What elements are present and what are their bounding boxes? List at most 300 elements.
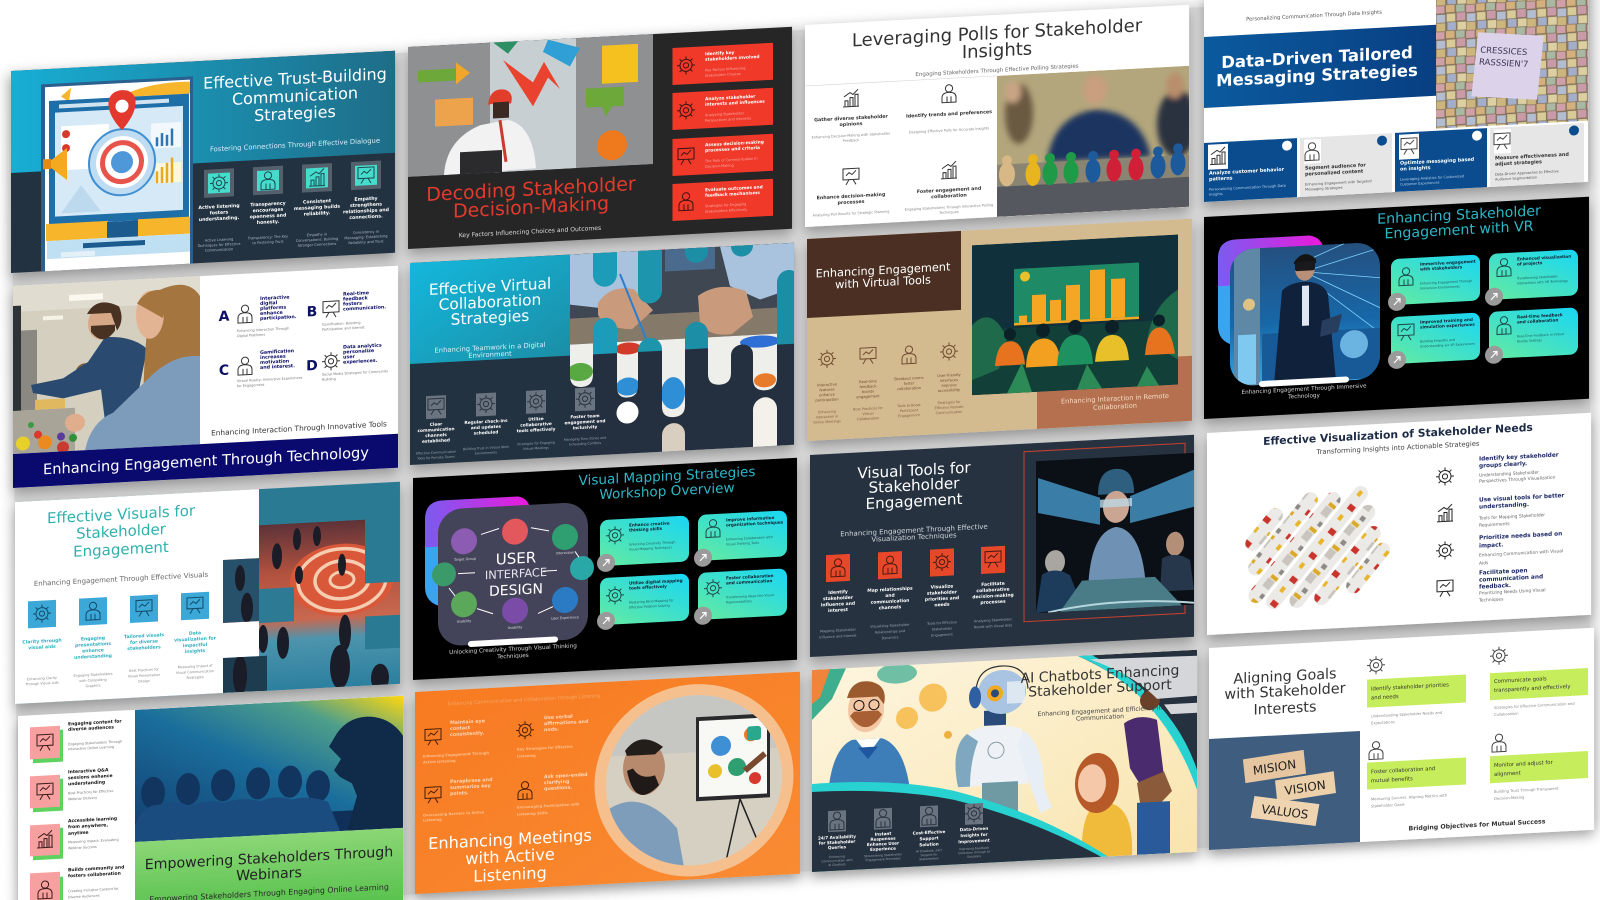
column labels: Enhance User <box>867 840 900 847</box>
column labels: for diverse <box>130 638 158 646</box>
caption box: Enhancing Interaction in Remote <box>1061 392 1169 406</box>
column captions: Best Practices for <box>129 667 159 673</box>
footer subtitle: Bridging Objectives for Mutual Success <box>1409 818 1546 832</box>
row 2: Best Practices for Effective <box>68 789 113 795</box>
card 3: on insights <box>1400 165 1431 173</box>
column labels: stakeholder <box>927 589 958 597</box>
row 1 <box>30 719 122 763</box>
option D: personalize <box>343 348 375 356</box>
row 1: diverse audiences <box>68 724 114 733</box>
column labels: 24/7 Availability <box>818 834 856 841</box>
backing shape <box>1218 235 1324 346</box>
column captions: Building Trust in Virtual Work <box>463 445 509 451</box>
card 4: Representations <box>726 599 752 605</box>
card 2: Visual Thinking Tools <box>726 541 759 547</box>
column labels: visual aids <box>28 644 56 651</box>
column captions: to Fostering Trust <box>252 240 284 245</box>
card 4: Stakeholders Effectively <box>705 208 747 214</box>
option C: Gamification <box>260 348 295 356</box>
title: Webinars <box>236 865 302 885</box>
column labels: strengthens <box>350 201 382 209</box>
card 4 <box>694 568 787 625</box>
column captions: Streamlining Stakeholder <box>864 852 903 858</box>
option B: feedback <box>343 295 369 303</box>
column captions: Communication with <box>822 858 853 863</box>
item icons <box>425 721 534 804</box>
image: mission vision values blocks: MISION <box>1252 757 1297 778</box>
column captions: Strategies <box>186 675 204 680</box>
title bar <box>13 434 398 488</box>
item labels: impact. <box>1479 542 1503 550</box>
card 4: Real-Time Feedback in Virtual <box>1517 332 1564 339</box>
user interface design diagram: Target Group <box>453 557 476 562</box>
title box <box>807 231 961 318</box>
column captions: Communication <box>205 247 233 253</box>
subtitle: Enhancing Engagement Through Effective <box>840 523 988 538</box>
item captions: Techniques <box>1478 596 1504 604</box>
card 3: Decision-Making <box>705 163 734 169</box>
subtitle: Transforming Insights into Actionable Strategies <box>1316 440 1480 456</box>
column labels: Queries <box>828 844 847 850</box>
column labels: scheduled <box>474 429 498 437</box>
column captions: Effective Communication <box>416 450 456 456</box>
column captions: with Compelling <box>79 678 107 683</box>
card 2: organization techniques <box>726 519 784 528</box>
row 2: understanding <box>68 779 105 787</box>
item labels: affirmations and <box>544 719 589 727</box>
card 2: personalized content <box>1305 169 1364 178</box>
card 1: with stakeholders <box>1420 264 1463 272</box>
column labels: Cost-Effective <box>913 829 946 836</box>
option C: increases <box>260 354 286 361</box>
item captions: Encouraging Participation with <box>517 802 580 810</box>
column labels: stakeholder <box>823 595 854 602</box>
column captions: Engagement Processes <box>866 856 901 862</box>
column labels: Empathy <box>354 196 378 203</box>
option A: platforms <box>260 305 286 312</box>
item labels: Facilitate open <box>1479 568 1527 577</box>
column labels: Transparency <box>250 201 286 208</box>
backing shape <box>425 496 531 607</box>
title: Communication <box>232 83 358 109</box>
title: Empowering Stakeholders Through <box>145 844 393 873</box>
item labels: questions. <box>544 785 572 792</box>
item captions: Active Listening <box>423 759 456 765</box>
column labels: messaging builds <box>294 204 340 212</box>
item labels: summarize key <box>450 783 492 791</box>
column labels: channels <box>879 604 902 611</box>
icon row <box>843 84 957 185</box>
card 1 <box>1204 138 1297 202</box>
column captions: Engagement <box>898 413 920 418</box>
card 4: Real-time feedback <box>1517 312 1563 320</box>
column labels: enhance <box>819 392 836 397</box>
card 3: Leveraging Analytics for Customized <box>1400 174 1464 182</box>
column labels: Support <box>920 835 938 841</box>
image: hands and striped mask <box>570 242 794 456</box>
item captions: Listening <box>423 818 442 823</box>
column captions: Collaboration <box>857 416 879 421</box>
goal 1 <box>1367 651 1466 726</box>
slide: Visual Mapping Strategies Workshop Overview <box>413 458 797 680</box>
column captions: Design <box>138 679 150 684</box>
card 1: Insights <box>1209 192 1223 197</box>
goal 2: transparently and effectively <box>1494 684 1570 694</box>
item labels: understanding. <box>1479 502 1529 511</box>
card 4: Measure effectiveness and <box>1495 152 1569 162</box>
column labels: Clarity through <box>22 638 62 646</box>
column labels: boosts <box>862 389 874 394</box>
card 1: Enhancing Engagement Through <box>1420 279 1472 286</box>
item captions: Tools for Mapping Stakeholder <box>1478 512 1545 522</box>
column labels: openness and <box>250 212 286 220</box>
row 4 <box>30 864 124 900</box>
user interface design diagram: INTERFACE <box>485 565 547 582</box>
card 1 <box>672 43 773 85</box>
teal inset tile <box>259 587 294 623</box>
card 3: Mastering Mind Mapping for <box>629 598 674 605</box>
item captions: Engaging Stakeholders Through Interactive Polling <box>905 203 993 212</box>
column labels: interfaces <box>940 378 958 383</box>
icon row <box>828 803 983 832</box>
card 3: Optimize messaging based <box>1400 157 1475 167</box>
user interface design diagram: Usability <box>508 625 522 630</box>
title: Visual Tools for <box>857 459 971 483</box>
goal 3: Foster collaboration and <box>1371 766 1435 775</box>
slide: Enhancing Stakeholder Engagement with VR <box>1204 197 1589 419</box>
title box: Enhancing Engagement <box>816 260 951 281</box>
slide: Enhancing Engagement Through Technology <box>13 266 398 488</box>
column labels: understanding. <box>199 215 239 223</box>
illustration: man, robot and woman <box>812 648 1197 875</box>
column labels: decision-making <box>972 592 1014 600</box>
subtitle: Environment <box>468 350 512 360</box>
column labels: collaboration <box>897 386 922 391</box>
title: Interests <box>1254 699 1316 719</box>
item captions: Feedback <box>843 138 860 143</box>
image: diagonal pills collage <box>1218 450 1412 649</box>
title: Aligning Goals <box>1233 666 1337 688</box>
column labels: for Stakeholder <box>819 839 856 846</box>
goal 4: Building Trust Through Transparent <box>1494 787 1559 794</box>
title: Strategies <box>254 102 336 125</box>
column labels: Clear <box>430 421 443 428</box>
title: Listening <box>473 863 547 886</box>
card 4: Audience Segmentation <box>1495 175 1537 182</box>
column labels: and <box>885 593 895 599</box>
option B: Real-time <box>343 290 370 298</box>
title: Engagement <box>866 490 962 513</box>
row 1: Engaging Stakeholders Through <box>68 740 122 746</box>
goal 1: and needs <box>1371 694 1399 701</box>
column captions: Influence and Interest <box>819 634 857 640</box>
subtitle bar <box>1164 703 1197 714</box>
title box: with Virtual Tools <box>835 273 931 292</box>
column labels: Foster team <box>570 413 600 421</box>
column labels: Facilitate <box>981 581 1005 588</box>
title: Effective Visuals for <box>47 501 196 527</box>
card 2: Analyzing Stakeholder <box>705 111 745 117</box>
title: AI Chatbots Enhancing <box>1021 663 1179 687</box>
column captions: Dynamics <box>882 635 899 640</box>
option D: Data analytics <box>343 343 382 351</box>
card 1: Immersive Environments <box>1420 285 1460 291</box>
option B: Gamification: Boosting <box>322 321 361 327</box>
goal 3 <box>1367 737 1466 809</box>
column labels: features <box>819 388 835 392</box>
row 3 <box>30 816 119 860</box>
caption box <box>1037 356 1192 429</box>
title: Enhancing Stakeholder <box>1377 203 1541 228</box>
column labels: Tailored visuals <box>124 632 164 640</box>
card 3: Building Empathy and <box>1420 338 1455 344</box>
slide: Empowering Stakeholders Through Webinars <box>18 696 403 900</box>
item captions: Key Strategies for Effective <box>517 745 573 752</box>
column labels: Instant <box>875 831 891 837</box>
card 4: and collaboration <box>1517 317 1558 325</box>
column captions: Managing Time Zones and <box>564 436 606 442</box>
option D: user <box>343 354 356 361</box>
column labels: improve <box>941 383 957 388</box>
goal 2: Collaboration <box>1494 712 1519 717</box>
title: Engagement with VR <box>1384 219 1534 242</box>
column labels: User-friendly <box>937 373 962 378</box>
column labels: Experience <box>870 846 896 852</box>
subtitle: Personalizing Communication Through Data Insights <box>1246 10 1382 23</box>
item captions: Enhancing Engagement Through <box>423 751 489 759</box>
user interface design diagram: Usability <box>457 619 471 624</box>
card 4: Foster collaboration <box>726 573 774 581</box>
column labels: collaborative <box>520 421 552 429</box>
option A: enhance <box>260 310 284 317</box>
goal 1: Identify stakeholder priorities <box>1371 682 1449 692</box>
title: with Active <box>465 845 555 868</box>
title: Decoding Stakeholder <box>426 173 636 206</box>
column labels: impactful <box>183 642 208 649</box>
subtitle: Engaging Stakeholders Through Effective Polling Strategies <box>915 64 1079 78</box>
column labels: Breakout rooms <box>894 376 924 381</box>
card 2 <box>1485 249 1578 306</box>
card 2: Segment audience for <box>1305 162 1366 172</box>
item captions: Techniques <box>938 210 959 215</box>
column captions: AI Chatbots: 24/7 <box>916 848 942 854</box>
column captions: Needs with Visual Aids <box>974 623 1012 629</box>
card 2 <box>1300 133 1392 197</box>
item labels: collaboration <box>931 192 967 200</box>
image: wall of sticky notes: CRESSICES <box>1480 46 1528 58</box>
title: Workshop Overview <box>599 480 735 503</box>
column labels: communication <box>417 426 455 434</box>
slide: Visual Tools for Stakeholder Engagement <box>810 435 1194 657</box>
card 4: feedback mechanisms <box>705 190 760 199</box>
column labels: Insights for <box>960 832 989 838</box>
icon row <box>426 387 595 419</box>
column captions: AI Chatbots <box>828 862 846 867</box>
card 3: simulation experiences <box>1420 322 1475 330</box>
column labels: Responses <box>870 836 896 842</box>
user interface design diagram <box>432 501 594 647</box>
icon row <box>818 342 958 368</box>
slide: Decoding Stakeholder Decision-Making <box>408 27 792 249</box>
title: Effective Virtual <box>429 275 551 299</box>
column labels: tools effectively <box>517 426 556 434</box>
slide: Data-Driven Tailored Messaging Strategies <box>1204 0 1588 202</box>
column labels: Map relationships <box>867 586 913 594</box>
option A: A <box>219 309 230 325</box>
column captions: Strategies for Engaging <box>517 440 555 446</box>
top subtitle: Enhancing Communication and Collaboration Through Listening <box>447 693 601 707</box>
icon row <box>28 592 209 628</box>
card 1: Unlocking Creativity Through <box>629 540 675 547</box>
card 1: patterns <box>1209 175 1233 183</box>
image: wall of sticky notes: RASSSIEN'7 <box>1478 58 1529 70</box>
row 1: Engaging content for <box>68 719 122 727</box>
option D: Social Media Strategies for Community <box>322 369 388 377</box>
user interface design diagram: User Experience <box>551 615 579 621</box>
column labels: connections. <box>349 213 383 221</box>
card 1: Analyze customer behavior <box>1209 167 1285 177</box>
column labels: Active listening <box>198 203 240 211</box>
column labels: influence and <box>821 601 855 608</box>
user interface design diagram: USER <box>496 549 536 569</box>
card 3: Improved training and <box>1420 317 1473 325</box>
card 4: Transforming Ideas into Visual <box>725 593 774 600</box>
item captions: Prioritizing Needs Using Visual <box>1479 587 1546 597</box>
image: man with VR headset <box>1230 242 1380 387</box>
card 1 <box>597 515 689 572</box>
column labels: Engaging <box>81 635 105 643</box>
column labels: honesty. <box>257 219 279 226</box>
column labels: engagement <box>856 394 880 399</box>
goal 4: Monitor and adjust for <box>1494 760 1553 769</box>
image: mission vision values blocks <box>1209 731 1360 850</box>
card 4: Data-Driven Approaches to Effective <box>1495 169 1559 177</box>
title: Stakeholder Support <box>1028 677 1172 701</box>
row 4: Creating Inclusive Content for <box>68 887 119 893</box>
column labels: relationships and <box>343 207 389 216</box>
title: Enhancing Meetings <box>428 826 592 853</box>
option A: Interactive <box>260 294 290 302</box>
title bar <box>1090 654 1197 702</box>
column labels: presentations <box>75 641 111 649</box>
column captions: Tools for Effective <box>926 620 957 626</box>
title: Visual Mapping Strategies <box>579 464 755 489</box>
user interface design diagram: Interaction <box>556 551 574 555</box>
title: Effective Visualization of Stakeholder Needs <box>1263 421 1533 448</box>
subtitle: Enhancing Engagement and Efficiency in <box>1038 705 1163 718</box>
goal 4: Decision-Making <box>1494 795 1524 801</box>
card 1: stakeholders involved <box>705 54 759 63</box>
title: Decision-Making <box>453 192 609 223</box>
title: Strategies <box>451 307 529 329</box>
column labels: foster <box>904 381 915 386</box>
card 3 <box>1395 128 1487 192</box>
card 2: Perspectives and Interests <box>705 116 751 123</box>
column labels: inclusivity <box>573 424 598 431</box>
card 1: Enhance creative <box>629 520 670 528</box>
title banner: Data-Driven Tailored <box>1221 43 1413 72</box>
item captions: Designing Effective Polls for Accurate Insights <box>909 126 989 135</box>
item labels: Maintain eye <box>450 718 486 726</box>
title: Insights <box>962 39 1032 63</box>
item labels: Ask open-ended <box>544 772 588 780</box>
item labels: opinions <box>840 121 863 128</box>
row 3: Accessible learning <box>68 816 117 824</box>
goal 3: mutual benefits <box>1371 776 1413 784</box>
item captions: Aids <box>1479 560 1489 567</box>
card 1: Stakeholder Choices <box>705 72 741 78</box>
column captions: Effective Remote <box>935 405 963 410</box>
option B: fosters <box>343 301 362 308</box>
option D: D <box>306 358 318 375</box>
goal 1: Expectations <box>1371 720 1395 725</box>
slide: Leveraging Polls for Stakeholder Insights <box>805 4 1197 227</box>
column captions: Empathy in <box>307 232 327 237</box>
column labels: enhance <box>82 647 104 654</box>
option A: digital <box>260 300 278 307</box>
column labels: Regular check-ins <box>464 418 508 426</box>
slide: Enhancing Meetings with Active Listening <box>415 672 800 894</box>
row 3: from anywhere, <box>68 822 108 830</box>
column captions: Environments <box>475 450 497 456</box>
card 1 <box>1388 254 1480 311</box>
row 3: Measuring Impact: Evaluating <box>68 838 119 844</box>
option A: Enhancing Interaction Through <box>237 326 289 333</box>
image ring <box>594 679 794 882</box>
column captions: Stronger Connections <box>298 242 337 248</box>
card 2: Analyze stakeholder <box>705 94 756 102</box>
column labels: Data <box>189 630 201 637</box>
image: mission vision values blocks: VISION <box>1284 778 1326 798</box>
card 2 <box>672 88 773 130</box>
option A: participation. <box>260 314 297 322</box>
card 3: Assess decision-making <box>705 139 764 148</box>
slide: Effective Trust-Building Communication Strategies <box>11 51 395 273</box>
column captions: Virtual Meetings <box>523 446 549 451</box>
column captions: Best Practices for <box>853 406 883 412</box>
card 4: Evaluate outcomes and <box>705 184 763 193</box>
subtitle: Key Factors Influencing Choices and Outcomes <box>459 225 601 239</box>
icon row <box>826 546 1005 582</box>
column captions: Conversations: Building <box>296 237 338 243</box>
image: woman at holographic table <box>1036 453 1194 613</box>
column labels: priorities and <box>925 595 959 603</box>
item captions: Understanding Stakeholder <box>1479 469 1539 479</box>
title: Effective Trust-Building <box>203 64 387 93</box>
item labels: feedback. <box>1479 583 1511 591</box>
image caption: Techniques <box>496 653 529 661</box>
goal 2 <box>1490 642 1588 717</box>
column labels: insights <box>185 648 206 655</box>
column labels: engagement and <box>565 418 605 426</box>
slide: Effective Virtual Collaboration Strategies <box>410 232 800 477</box>
column labels: understanding <box>74 653 112 661</box>
image: man at whiteboard <box>606 695 782 866</box>
card 3: tools effectively <box>629 584 667 591</box>
image: monitor with target illustration <box>41 76 193 271</box>
column labels: Utilize <box>528 416 544 423</box>
column labels: stakeholders <box>127 644 161 652</box>
item captions: Perspectives Through Visualization <box>1479 475 1556 485</box>
slide: AI Chatbots Enhancing Stakeholder Support <box>812 648 1197 875</box>
column labels: and updates <box>471 424 502 431</box>
column labels: Consistent <box>303 198 332 206</box>
column labels: Data-Driven <box>960 826 988 832</box>
icons row <box>204 161 381 198</box>
item captions: Enhancing Communication with Visual <box>1479 548 1563 559</box>
goal 3: Measuring Success: Aligning Metrics with <box>1371 793 1448 801</box>
option B <box>307 289 386 333</box>
